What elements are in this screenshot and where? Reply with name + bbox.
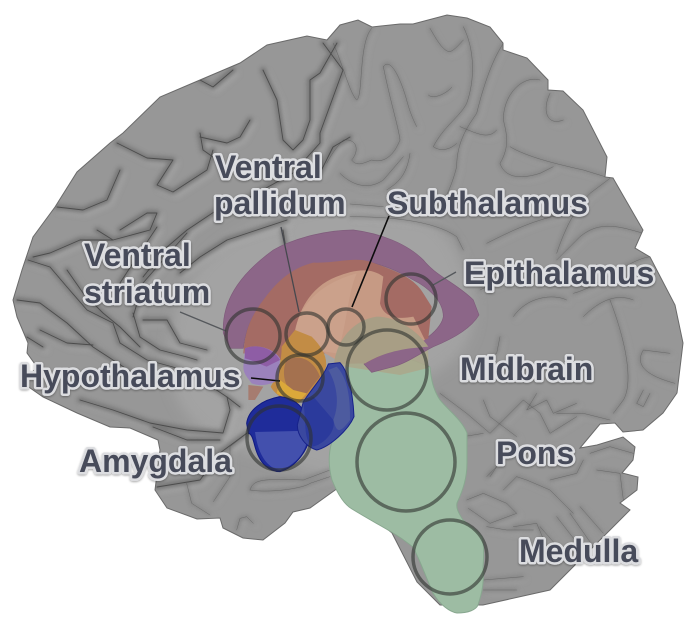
orange: hypothalamus — [271, 330, 326, 404]
medial light area — [169, 204, 474, 480]
labels: Hypothalamus — [20, 358, 240, 394]
purple: cingulate and fornix — [223, 230, 479, 372]
labels: Pons — [496, 435, 574, 471]
blue: hippocampal mass — [297, 363, 354, 450]
labels: pallidum — [214, 185, 346, 221]
beige dome above midbrain — [335, 318, 428, 375]
blue: amygdala — [247, 397, 311, 472]
red-brown: thalamic shell — [243, 260, 432, 363]
labels: Amygdala — [79, 443, 232, 479]
limbic structures (zoom-space coordinates) — [223, 230, 479, 472]
labels: Midbrain — [460, 351, 593, 387]
leader lines — [180, 216, 456, 381]
labels: Subthalamus — [387, 185, 588, 221]
lilac: preoptic region — [243, 346, 280, 385]
peach: thalamus core — [295, 270, 425, 363]
labels: Ventral — [215, 149, 322, 185]
labels: Epithalamus — [464, 255, 654, 291]
labels: Medulla — [519, 533, 638, 569]
labels: Ventral — [84, 237, 191, 273]
labels: striatum — [84, 274, 210, 310]
labels — [20, 149, 654, 569]
gyral highlight — [22, 47, 641, 492]
beige: midbrain cap — [334, 317, 428, 364]
green: brainstem — [329, 355, 484, 613]
location circles — [226, 274, 487, 594]
